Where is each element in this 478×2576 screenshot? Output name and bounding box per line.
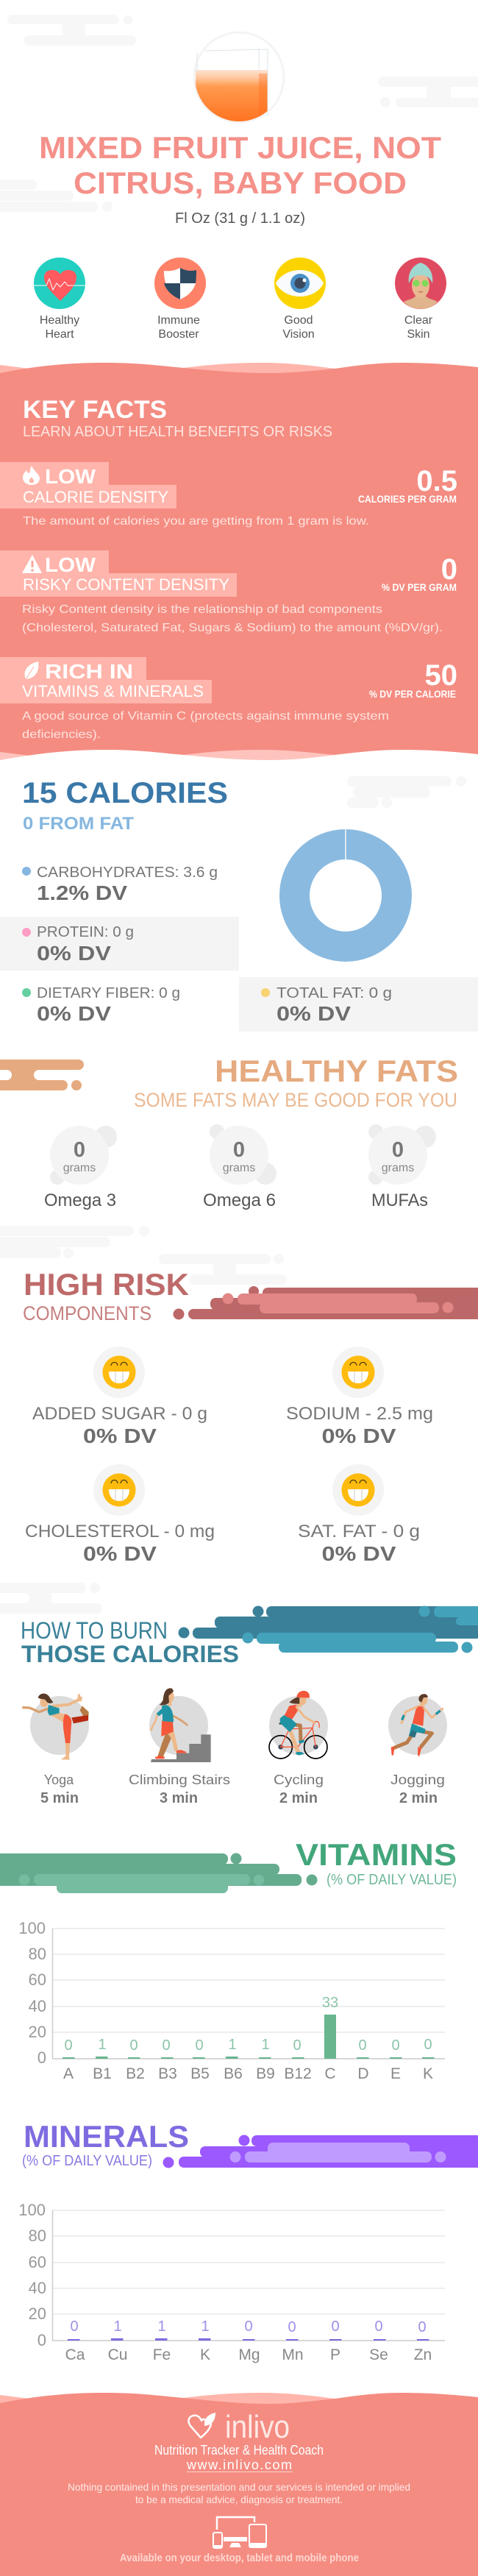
x axis labels: Cu	[108, 2346, 127, 2363]
title: MIXED FRUIT JUICE, NOT	[39, 130, 441, 165]
value labels: 0	[70, 2318, 79, 2335]
key fact: rich in vitamins and minerals: VITAMINS & MINERALS	[22, 682, 204, 700]
legend: dietary fiber: 0% DV	[37, 1002, 111, 1025]
heading: how to burn those calories: THOSE CALORIES	[21, 1641, 239, 1667]
activity: climbing stairs: 3 min	[160, 1790, 198, 1806]
bar chart: vitamins	[18, 1919, 445, 2082]
key fact: risky content density: 0	[441, 553, 457, 586]
y axis labels	[18, 1919, 46, 2067]
figure: woman on bicycle	[269, 1691, 327, 1759]
benefit icons row	[34, 258, 446, 341]
heading: calories: 15 CALORIES	[22, 777, 228, 809]
x axis labels: B1	[93, 2065, 112, 2082]
heading: healthy fats	[134, 1054, 458, 1111]
y axis labels: 60	[29, 1970, 46, 1989]
fat: omega 6	[203, 1124, 277, 1210]
serving size subtitle: Fl Oz (31 g / 1.1 oz)	[175, 210, 305, 227]
label: clear skin	[404, 314, 433, 341]
value labels: 0	[244, 2318, 253, 2335]
heading: calories: 0 FROM FAT	[23, 814, 134, 834]
icon: smiley	[332, 1346, 384, 1398]
panel: key facts background	[0, 363, 478, 769]
legend: dietary fiber: DIETARY FIBER: 0 g	[37, 985, 180, 1001]
icon: immune booster shield	[154, 258, 206, 309]
x axis labels: K	[200, 2346, 210, 2363]
value labels: 0	[358, 2037, 367, 2054]
label: good vision: Vision	[282, 328, 315, 341]
fat: omega 3: 0	[74, 1138, 85, 1162]
bars	[68, 2338, 429, 2341]
x axis labels: B2	[126, 2065, 145, 2082]
heading: minerals: (% OF DAILY VALUE)	[22, 2153, 152, 2169]
logo: inlivo: inlivo	[225, 2409, 290, 2445]
decorative cloud above burn section	[0, 1583, 104, 1614]
legend: protein: PROTEIN: 0 g	[37, 924, 134, 940]
label: immune booster	[157, 314, 200, 341]
y axis labels: 80	[29, 2226, 46, 2245]
x axis labels: Ca	[65, 2346, 85, 2363]
fat: omega 6: grams	[223, 1162, 255, 1174]
disclaimer: to be a medical advice, diagnosis or treatment.	[135, 2494, 343, 2505]
fat: omega 3	[44, 1126, 117, 1210]
activity: cycling: 2 min	[279, 1790, 318, 1806]
key fact: rich in vitamins and minerals	[0, 657, 457, 741]
figure: woman climbing stairs	[151, 1688, 211, 1762]
value labels: 1	[228, 2037, 237, 2053]
value labels: 33	[322, 1995, 338, 2011]
fat: mufas: 0	[392, 1138, 404, 1162]
heading: vitamins: (% OF DAILY VALUE)	[327, 1872, 457, 1888]
y axis labels: 0	[38, 2048, 46, 2067]
value labels	[64, 1995, 432, 2054]
value labels: 1	[261, 2037, 270, 2053]
value labels	[70, 2318, 427, 2335]
key fact: calorie density: The amount of calories you are getting from 1 gram is low.	[23, 515, 369, 528]
y axis labels: 0	[38, 2331, 46, 2349]
label: healthy heart: Heart	[45, 328, 74, 341]
key fact: rich in vitamins and minerals: deficiencies).	[22, 728, 101, 741]
legend: dietary fiber	[22, 985, 180, 1025]
x axis labels: Mn	[282, 2346, 304, 2363]
icon: smiley	[93, 1346, 145, 1398]
heading: healthy fats: SOME FATS MAY BE GOOD FOR YOU	[134, 1089, 457, 1111]
activity: jogging: 2 min	[399, 1790, 438, 1806]
x axis labels: B9	[256, 2065, 275, 2082]
value labels: 0	[331, 2318, 340, 2335]
activity: cycling	[269, 1691, 328, 1806]
heading: calories	[22, 777, 228, 834]
activity: jogging: Jogging	[390, 1773, 445, 1787]
heading: minerals	[22, 2119, 189, 2169]
key fact: risky content density: Risky Content density is the relationship of bad components	[22, 603, 382, 616]
x axis labels: E	[390, 2065, 401, 2082]
x axis labels: B3	[158, 2065, 177, 2082]
y axis labels: 20	[29, 2023, 46, 2041]
risk item: sodium: SODIUM - 2.5 mg	[286, 1404, 433, 1424]
decorative clouds top	[0, 15, 478, 212]
value labels: 1	[113, 2318, 122, 2335]
activity: yoga	[24, 1694, 89, 1806]
legend: carbohydrates: CARBOHYDRATES: 3.6 g	[37, 865, 218, 881]
y axis labels: 80	[29, 1945, 46, 1963]
value labels: 1	[157, 2318, 166, 2335]
x axis labels: D	[357, 2065, 369, 2082]
activity: yoga: Yoga	[44, 1773, 74, 1787]
fat: omega 3: grams	[63, 1162, 96, 1174]
icon: warning triangle	[22, 555, 42, 573]
activity: cycling: Cycling	[274, 1773, 324, 1787]
label: immune booster: Booster	[158, 328, 199, 341]
burn calories banner shape	[178, 1605, 478, 1653]
value labels: 0	[391, 2037, 400, 2054]
key fact: calorie density: CALORIES PER GRAM	[358, 493, 457, 505]
key fact: risky content density: LOW	[45, 553, 96, 576]
decorative clouds mid	[0, 1226, 287, 1285]
value labels: 0	[293, 2037, 302, 2054]
legend: carbohydrates: 1.2% DV	[37, 881, 127, 904]
label: clear skin: Skin	[407, 328, 430, 341]
icon: good vision eye	[274, 258, 326, 309]
key fact: calorie density: 0.5	[416, 465, 457, 497]
y axis labels: 40	[29, 2279, 46, 2297]
logo: inlivo	[188, 2409, 290, 2445]
key fact: rich in vitamins and minerals: % DV PER CALORIE	[369, 688, 456, 700]
header: juice glass image	[194, 32, 284, 125]
heading: high risk components	[23, 1267, 189, 1324]
x axis labels: A	[63, 2065, 74, 2082]
key fact: risky content density	[0, 550, 457, 634]
label: good vision: Good	[284, 314, 313, 327]
icon: heart with leaf	[188, 2413, 215, 2438]
heading: minerals: MINERALS	[24, 2119, 189, 2154]
decorative cloud near calories	[347, 776, 466, 808]
risk item: cholesterol: 0% DV	[83, 1542, 157, 1565]
key fact: rich in vitamins and minerals: RICH IN	[45, 660, 133, 683]
donut chart	[294, 828, 397, 946]
y axis labels	[18, 2201, 46, 2349]
availability note: Available on your desktop, tablet and mobile phone	[120, 2552, 359, 2564]
x axis labels: B12	[284, 2065, 312, 2082]
key fact: risky content density: (Cholesterol, Saturated Fat, Sugars & Sodium) to the amount (%DV/gr).	[22, 622, 443, 634]
risk item: saturated fat: 0% DV	[322, 1542, 396, 1565]
icon: smiley	[93, 1464, 145, 1516]
label: clear skin: Clear	[404, 314, 433, 327]
legend: total fat: 0% DV	[277, 1002, 351, 1025]
title: CITRUS, BABY FOOD	[74, 166, 407, 200]
heading: how to burn those calories	[21, 1617, 239, 1667]
vitamins banner shape	[0, 1853, 318, 1893]
activity: climbing stairs	[129, 1688, 230, 1806]
healthy fats banner shape	[0, 1060, 85, 1090]
x axis labels: P	[330, 2346, 340, 2363]
key fact: calorie density: CALORIE DENSITY	[23, 488, 168, 506]
x axis labels: Se	[369, 2346, 388, 2363]
risk item: sodium: 0% DV	[322, 1424, 396, 1447]
heading: high risk components: COMPONENTS	[23, 1302, 151, 1324]
heading: vitamins: VITAMINS	[296, 1837, 457, 1872]
label: good vision	[282, 314, 315, 341]
key fact: calorie density	[0, 462, 457, 528]
bar chart: minerals	[18, 2201, 445, 2363]
legend: protein	[0, 917, 239, 971]
label: healthy heart	[40, 314, 79, 341]
value labels: 0	[129, 2037, 138, 2054]
y axis labels: 100	[18, 2201, 46, 2219]
fat: omega 6: Omega 6	[203, 1191, 276, 1210]
disclaimer: Nothing contained in this presentation and our services is intended or implied	[68, 2481, 410, 2493]
value labels: 0	[418, 2319, 427, 2335]
heading: key facts	[23, 396, 332, 440]
x axis labels	[65, 2346, 432, 2363]
value labels: 0	[424, 2037, 432, 2053]
key fact: rich in vitamins and minerals: A good source of Vitamin C (protects against immune system	[22, 710, 389, 723]
fat: mufas: MUFAs	[371, 1191, 428, 1210]
value labels: 0	[64, 2037, 73, 2054]
icon: leaf	[25, 661, 38, 679]
risk item: added sugar: 0% DV	[83, 1424, 157, 1447]
risk item: saturated fat	[298, 1464, 420, 1565]
fat: mufas	[368, 1124, 436, 1210]
x axis labels: Mg	[238, 2346, 260, 2363]
activity: climbing stairs: Climbing Stairs	[129, 1773, 230, 1787]
value labels: 1	[98, 2037, 107, 2053]
risk item: sodium	[286, 1346, 433, 1447]
heading: key facts: LEARN ABOUT HEALTH BENEFITS OR RISKS	[23, 424, 332, 440]
heading: key facts: KEY FACTS	[23, 396, 167, 424]
key fact: calorie density: LOW	[45, 465, 96, 488]
x axis labels	[63, 2065, 433, 2082]
x axis labels: K	[423, 2065, 433, 2082]
legend: total fat	[239, 977, 478, 1032]
high risk banner shape	[174, 1286, 478, 1320]
icon: devices	[213, 2517, 266, 2548]
risk item: saturated fat: SAT. FAT - 0 g	[298, 1522, 420, 1541]
key fact: risky content density: % DV PER GRAM	[382, 581, 457, 593]
heading: healthy fats: HEALTHY FATS	[215, 1054, 458, 1088]
x axis labels: B5	[190, 2065, 210, 2082]
fat: omega 3: Omega 3	[44, 1191, 116, 1210]
legend: protein: 0% DV	[37, 942, 111, 965]
heading: how to burn those calories: HOW TO BURN	[21, 1617, 168, 1644]
fat: mufas: grams	[382, 1162, 414, 1174]
icon: healthy heart	[34, 258, 85, 309]
minerals banner shape	[163, 2135, 478, 2168]
fat: omega 6: 0	[233, 1138, 245, 1162]
legend: carbohydrates	[22, 865, 218, 904]
figure: man jogging	[391, 1694, 443, 1757]
icon: clear skin face	[395, 258, 446, 309]
legend: total fat: TOTAL FAT: 0 g	[277, 985, 392, 1001]
label: healthy heart: Healthy	[40, 314, 79, 327]
activity: jogging	[388, 1694, 447, 1806]
y axis labels: 20	[29, 2304, 46, 2323]
key fact: rich in vitamins and minerals: 50	[425, 659, 457, 692]
icon: smiley	[332, 1464, 384, 1516]
risk item: cholesterol: CHOLESTEROL - 0 mg	[25, 1522, 215, 1541]
value labels: 1	[201, 2318, 210, 2335]
panel: footer background	[0, 2393, 478, 2576]
heading: vitamins	[296, 1837, 457, 1888]
key fact: risky content density: RISKY CONTENT DENSITY	[23, 575, 229, 594]
x axis labels: Zn	[414, 2346, 432, 2363]
bars	[63, 2015, 434, 2059]
disclaimer	[68, 2481, 410, 2505]
value labels: 0	[162, 2037, 171, 2054]
risk item: added sugar: ADDED SUGAR - 0 g	[32, 1404, 207, 1424]
title	[39, 130, 441, 200]
value labels: 0	[195, 2037, 204, 2054]
footer tagline and url: www.inlivo.com	[186, 2458, 292, 2472]
activity: yoga: 5 min	[40, 1790, 79, 1806]
risk item: added sugar	[32, 1346, 207, 1447]
x axis labels: C	[324, 2065, 336, 2082]
value labels: 0	[374, 2318, 383, 2335]
label: immune booster: Immune	[157, 314, 200, 327]
value labels: 0	[288, 2319, 296, 2335]
y axis labels: 40	[29, 1997, 46, 2015]
footer tagline and url	[154, 2443, 324, 2472]
x axis labels: B6	[224, 2065, 243, 2082]
icon: flame	[23, 466, 40, 485]
y axis labels: 100	[18, 1919, 46, 1937]
y axis labels: 60	[29, 2253, 46, 2271]
heading: high risk components: HIGH RISK	[24, 1267, 189, 1302]
x axis labels: Fe	[153, 2346, 171, 2363]
footer tagline and url: Nutrition Tracker & Health Coach	[154, 2443, 324, 2458]
risk item: cholesterol	[25, 1464, 215, 1565]
figure: yoga pose	[24, 1694, 89, 1760]
